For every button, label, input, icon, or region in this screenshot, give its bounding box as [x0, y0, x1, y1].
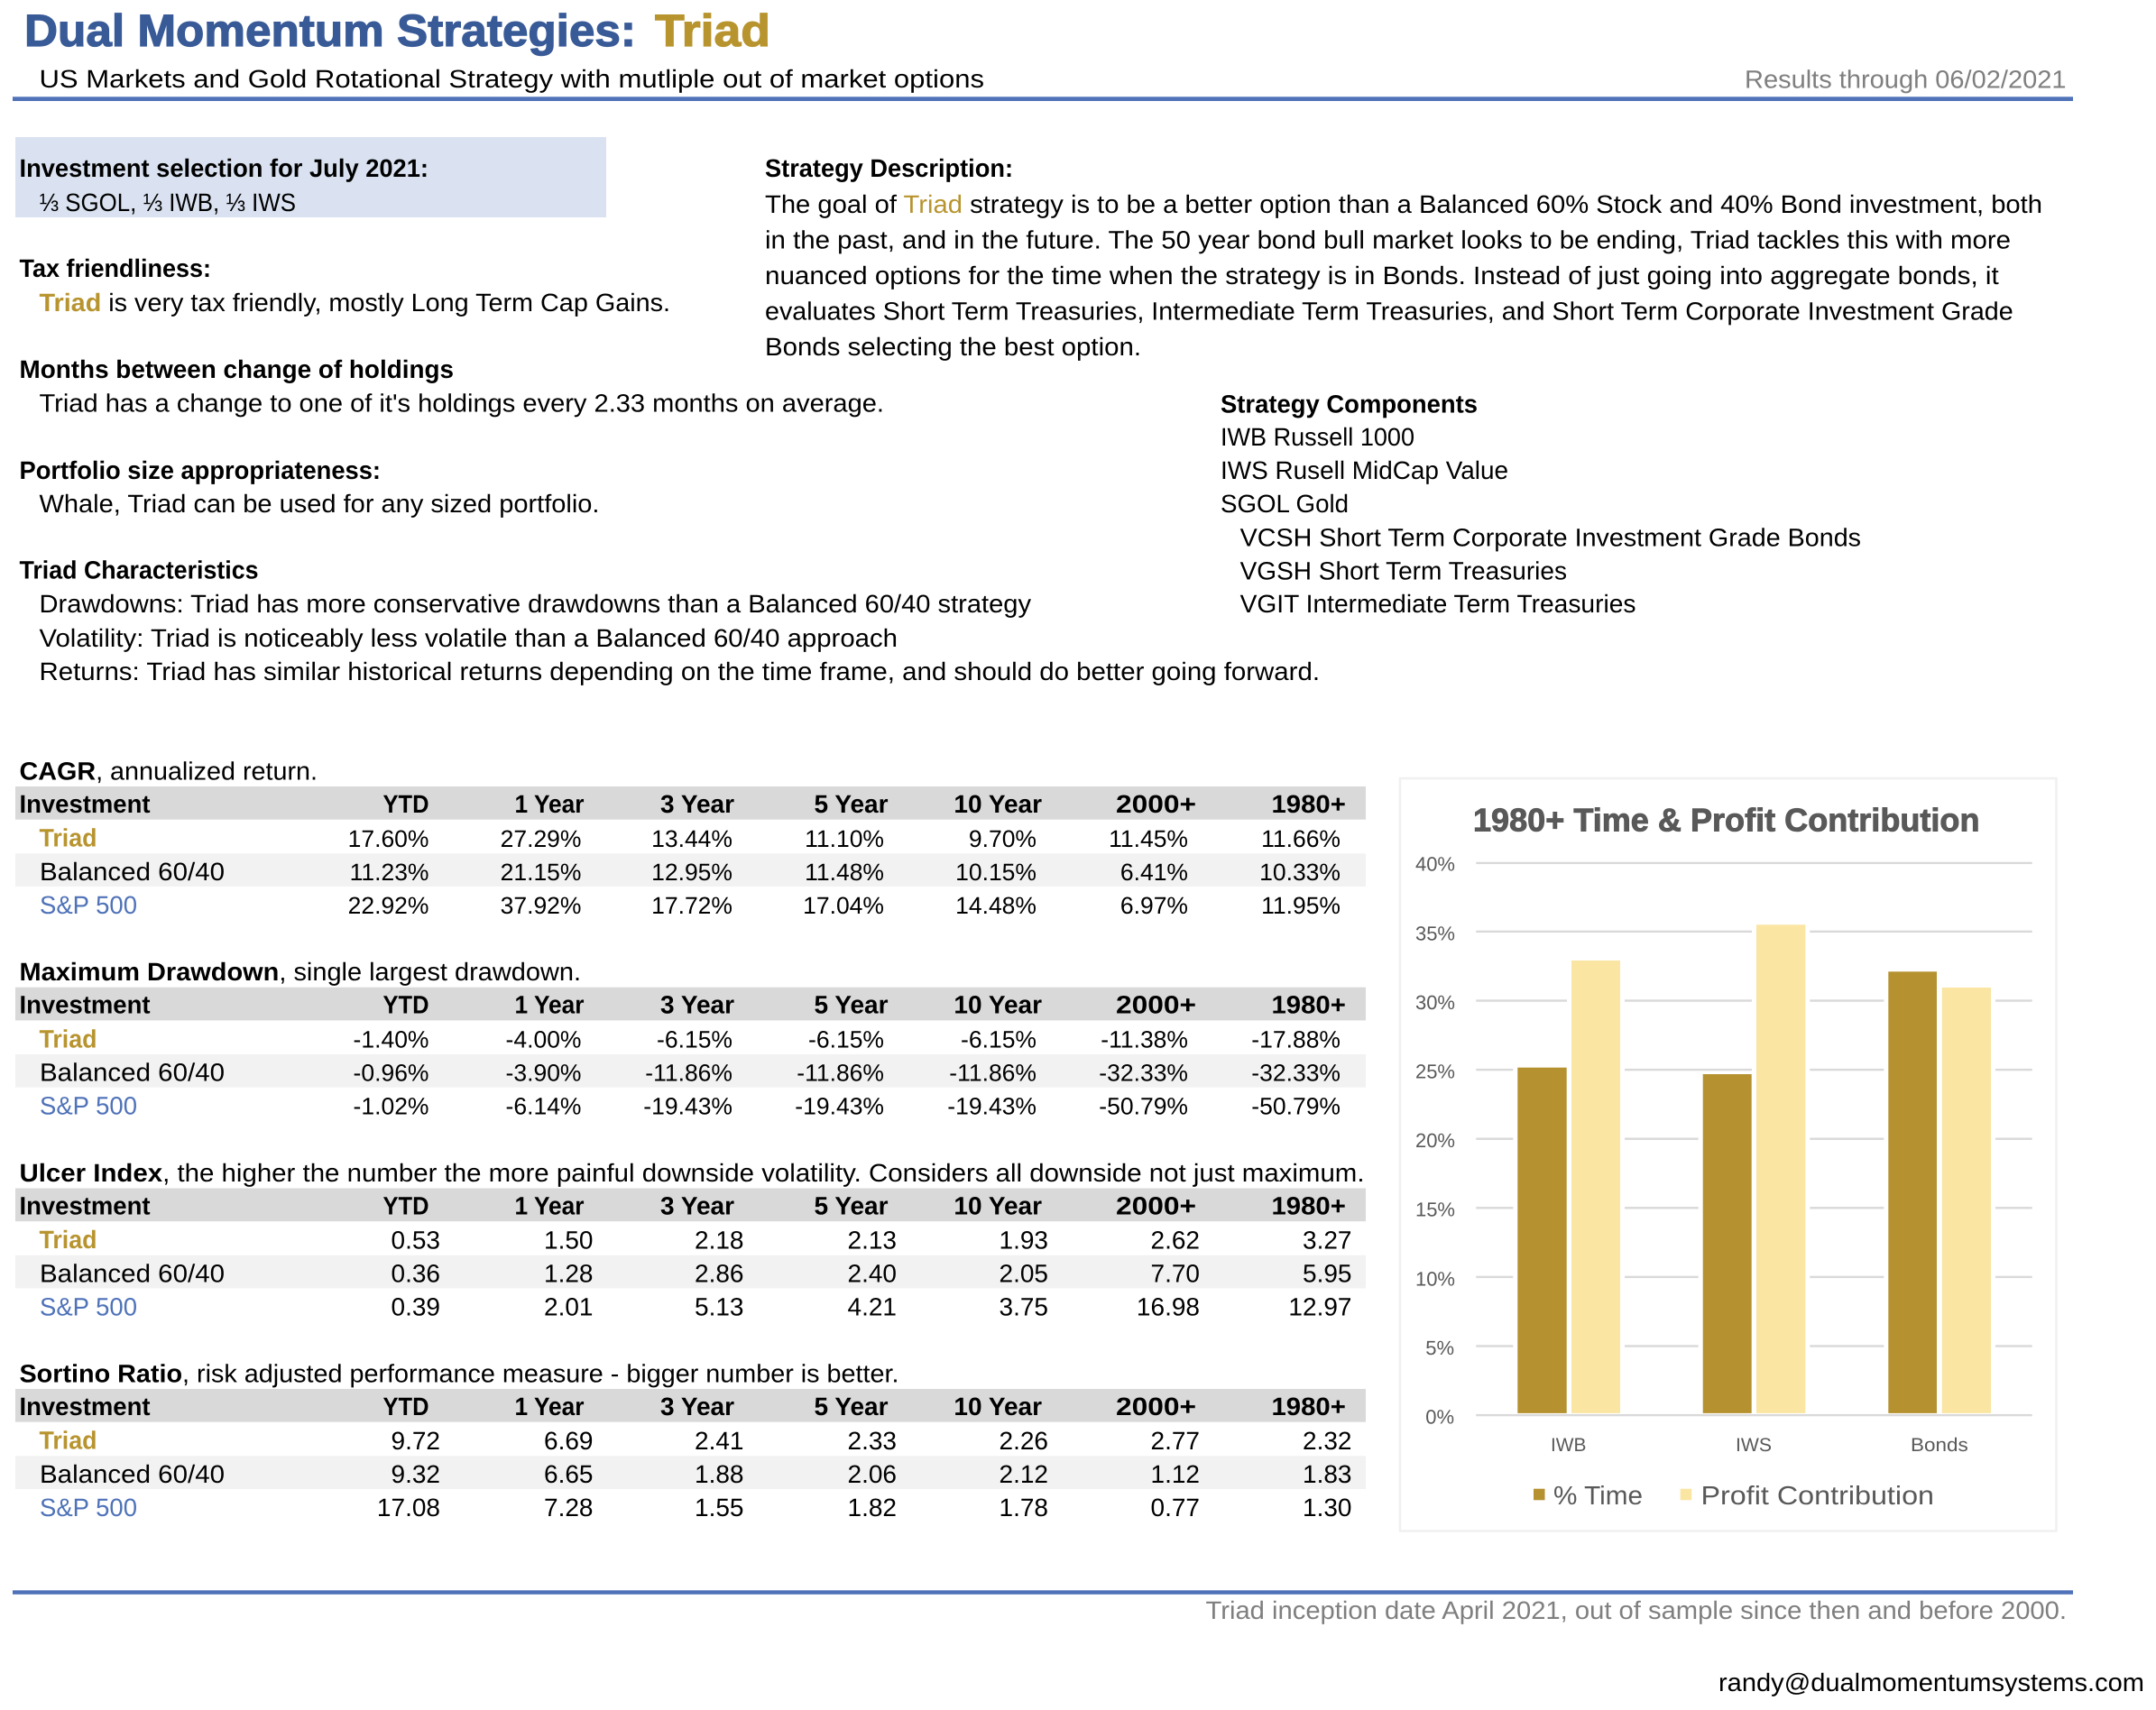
footnote: Triad inception date April 2021, out of sample since then and before 2000. [1205, 1596, 2067, 1624]
row: Balanced 60/40: Balanced 60/40 [40, 1460, 225, 1488]
bars: IWB [1513, 961, 1625, 1414]
header row: Investment [20, 790, 150, 818]
row: Balanced 60/40: -32.33% [1099, 1060, 1188, 1087]
table: CAGR [15, 758, 1366, 919]
row: Balanced 60/40: 11.48% [805, 859, 884, 886]
text block: strategy components: VCSH Short Term Corporate Investment Grade Bonds [1240, 523, 1861, 552]
row: Triad: 1.93 [1000, 1227, 1048, 1254]
header row: YTD [382, 991, 429, 1019]
table: Sortino Ratio [15, 1360, 1366, 1522]
header row: 1980+ [1272, 991, 1346, 1019]
x axis labels: IWS [1736, 1435, 1772, 1456]
header row: Investment [20, 991, 150, 1019]
row: Triad: 2.77 [1151, 1427, 1200, 1455]
row: Triad: 2.18 [695, 1227, 743, 1254]
row: S&P 500: 3.75 [1000, 1293, 1048, 1320]
table title: Maximum Drawdown , single largest drawdown. [20, 958, 581, 986]
header row [15, 1189, 1366, 1221]
bars: IWS [1699, 924, 1810, 1414]
title: Dual Momentum Strategies: [24, 5, 636, 56]
row: Triad: 13.44% [651, 825, 732, 852]
row: Balanced 60/40: -0.96% [354, 1060, 429, 1087]
row: Balanced 60/40: 2.86 [695, 1259, 743, 1288]
row: S&P 500: 11.95% [1261, 892, 1341, 919]
y axis labels: 35% [1415, 922, 1455, 944]
row: Triad [40, 1025, 1341, 1053]
row: Balanced 60/40: 2.12 [1000, 1460, 1048, 1488]
header row: 10 Year [954, 1393, 1042, 1420]
row: Balanced 60/40: 11.23% [350, 859, 429, 886]
row: S&P 500: 12.97 [1288, 1293, 1351, 1320]
header row: 3 Year [660, 790, 734, 818]
row: Triad: 0.53 [392, 1227, 440, 1254]
row: S&P 500: 6.97% [1120, 892, 1188, 919]
row: Triad: 9.72 [392, 1427, 440, 1455]
y axis labels [1415, 853, 1455, 1429]
row: Triad: 11.45% [1109, 825, 1188, 852]
row: S&P 500: S&P 500 [40, 1293, 137, 1320]
row: Triad: 2.26 [1000, 1427, 1048, 1455]
text block: tax friendliness [20, 254, 670, 317]
row: Balanced 60/40: 12.95% [651, 859, 732, 886]
header row: YTD [382, 1192, 429, 1219]
text block: strategy components: Strategy Components [1221, 390, 1478, 418]
row: S&P 500: 7.28 [544, 1494, 594, 1522]
y axis labels: 10% [1415, 1267, 1455, 1290]
row: Triad: Triad [40, 824, 97, 851]
row: Balanced 60/40: -11.86% [645, 1060, 732, 1087]
header row: 5 Year [814, 790, 889, 818]
row: Balanced 60/40 [15, 1255, 1366, 1288]
bar chart: 1980+ time and profit contribution [1400, 778, 2057, 1531]
results date: Results through 06/02/2021 [1745, 65, 2066, 94]
panel: investment selection: ⅓ SGOL, ⅓ IWB, ⅓ IWS [40, 188, 296, 216]
header row: 10 Year [954, 1192, 1042, 1219]
row: S&P 500: -50.79% [1099, 1093, 1188, 1120]
text block: triad characteristics: Volatility: Triad is noticeably less volatile than a Balanced 60/40 approach [40, 624, 898, 652]
row: S&P 500: -19.43% [643, 1093, 732, 1120]
y axis labels: 30% [1415, 991, 1455, 1014]
contact email: randy@dualmomentumsystems.com [1718, 1669, 2144, 1696]
row: Balanced 60/40: 6.41% [1120, 859, 1188, 886]
header row: 3 Year [660, 991, 734, 1019]
text block: triad characteristics: Returns: Triad has similar historical returns depending on the time frame, and should do better going forward. [40, 657, 1320, 685]
y axis labels: 25% [1415, 1061, 1455, 1082]
row: S&P 500: 16.98 [1137, 1293, 1200, 1320]
row: Balanced 60/40 [15, 1456, 1366, 1489]
text block: strategy description: in the past, and in the future. The 50 year bond bull market looks to be ending, Triad tackles this with more [765, 225, 2011, 254]
row: S&P 500: 17.04% [803, 892, 884, 919]
row: Triad: 2.62 [1151, 1227, 1200, 1254]
row: Triad: 2.33 [848, 1427, 897, 1455]
row: S&P 500: -1.02% [354, 1093, 429, 1120]
header row: 2000+ [1116, 1393, 1196, 1420]
row: Triad [40, 824, 1341, 852]
row: Balanced 60/40 [15, 1054, 1366, 1088]
text block: portfolio size: Whale, Triad can be used for any sized portfolio. [40, 490, 599, 518]
row: S&P 500: S&P 500 [40, 1092, 137, 1120]
row: Triad: 11.66% [1261, 825, 1341, 852]
row: Balanced 60/40: 2.05 [1000, 1259, 1048, 1288]
text block: strategy components: SGOL Gold [1221, 490, 1349, 518]
header row: 2000+ [1116, 790, 1196, 818]
row: S&P 500: 1.55 [695, 1494, 743, 1522]
table title: Ulcer Index , the higher the number the more painful downside volatility. Considers all downside not just maximum. [20, 1159, 1364, 1187]
chart title: 1980+ Time & Profit Contribution [1473, 802, 1979, 839]
row: Balanced 60/40: 1.88 [695, 1460, 743, 1488]
text block: months between change of holdings: Triad has a change to one of it's holdings every 2.33 months on average. [40, 390, 884, 417]
row: S&P 500: 5.13 [695, 1293, 743, 1320]
header row: 3 Year [660, 1192, 734, 1219]
row: Balanced 60/40: Balanced 60/40 [40, 1259, 225, 1288]
text block: tax friendliness: Triad is very tax friendly, mostly Long Term Cap Gains. [40, 289, 670, 317]
header row: 10 Year [954, 991, 1042, 1019]
row: Triad: 3.27 [1303, 1227, 1351, 1254]
row: S&P 500: 2.01 [544, 1293, 594, 1320]
text block: strategy description [765, 154, 2042, 361]
text block: strategy components [1221, 390, 1861, 618]
header row: 1 Year [514, 1393, 585, 1420]
y axis labels: 5% [1425, 1337, 1454, 1359]
row: Balanced 60/40: 0.36 [392, 1259, 440, 1288]
row: Triad: 2.41 [695, 1427, 743, 1455]
row: Balanced 60/40: Balanced 60/40 [40, 858, 225, 886]
row: Balanced 60/40: 2.06 [848, 1460, 897, 1488]
row: S&P 500: 17.08 [377, 1494, 440, 1522]
text block: strategy components: IWB Russell 1000 [1221, 423, 1414, 451]
row: Balanced 60/40: -3.90% [506, 1060, 581, 1087]
header row: 1 Year [514, 991, 585, 1019]
x axis labels: IWB [1551, 1435, 1586, 1456]
y axis labels: 40% [1415, 853, 1455, 876]
row: Triad: Triad [40, 1025, 97, 1053]
text block: strategy description: nuanced options for the time when the strategy is in Bonds. Instead of just going into aggregate bonds, it [765, 262, 1999, 290]
panel: investment selection [15, 137, 606, 217]
y axis labels: 20% [1415, 1129, 1455, 1152]
row: Triad: -11.38% [1101, 1026, 1188, 1053]
row: Triad: 2.32 [1303, 1427, 1351, 1455]
row: Balanced 60/40: 9.32 [392, 1460, 440, 1488]
row: Balanced 60/40: 6.65 [544, 1460, 594, 1488]
text block: strategy description: The goal of Triad strategy is to be a better option than a Balanced 60% Stock and 40% Bond investment, both [765, 190, 2042, 218]
row: S&P 500: 0.39 [392, 1293, 440, 1320]
header row: YTD [382, 1393, 429, 1420]
text block: months between change of holdings [20, 355, 884, 417]
text block: strategy components: VGSH Short Term Treasuries [1240, 557, 1567, 584]
row: S&P 500 [40, 1293, 1351, 1320]
row: S&P 500: -19.43% [795, 1093, 884, 1120]
row: S&P 500: 17.72% [651, 892, 732, 919]
row: Balanced 60/40: -32.33% [1251, 1060, 1341, 1087]
header row: 1980+ [1272, 790, 1346, 818]
y axis labels: 0% [1425, 1405, 1454, 1429]
panel: investment selection: Investment selection for July 2021: [20, 154, 428, 182]
row: Triad: 11.10% [805, 825, 884, 852]
header row: 10 Year [954, 790, 1042, 818]
bars: Bonds [1884, 971, 1995, 1414]
header row: 5 Year [814, 1192, 889, 1219]
header row [15, 1389, 1366, 1422]
table: Maximum Drawdown [15, 958, 1366, 1120]
text block: months between change of holdings: Months between change of holdings [20, 355, 454, 383]
row: S&P 500: 1.30 [1303, 1494, 1351, 1522]
row: Balanced 60/40 [15, 853, 1366, 887]
text block: strategy description: evaluates Short Term Treasuries, Intermediate Term Treasuries, and Short Term Corporate Investment Grade [765, 297, 2013, 325]
text block: portfolio size: Portfolio size appropriateness: [20, 456, 381, 484]
row: Balanced 60/40: 21.15% [501, 859, 581, 886]
text block: strategy description: Strategy Description: [765, 154, 1013, 182]
header row: 5 Year [814, 1393, 889, 1420]
text block: triad characteristics [20, 556, 1320, 685]
row: Triad: 9.70% [969, 825, 1037, 852]
text block: strategy components: IWS Rusell MidCap Value [1221, 456, 1508, 484]
row: S&P 500: -6.14% [506, 1093, 581, 1120]
x axis labels: Bonds [1911, 1435, 1968, 1456]
header row [15, 786, 1366, 820]
x axis labels [1551, 1435, 1968, 1456]
row: S&P 500: 37.92% [501, 892, 581, 919]
header row: 1980+ [1272, 1393, 1346, 1420]
row: Triad: 1.50 [544, 1227, 594, 1254]
row: Balanced 60/40: -11.86% [949, 1060, 1037, 1087]
row: S&P 500: 1.82 [848, 1494, 897, 1522]
row: Balanced 60/40: Balanced 60/40 [40, 1059, 225, 1087]
header row: 2000+ [1116, 1192, 1196, 1219]
row: S&P 500 [40, 1092, 1341, 1120]
table: Ulcer Index [15, 1159, 1366, 1320]
header row: 1 Year [514, 790, 585, 818]
text block: triad characteristics: Drawdowns: Triad has more conservative drawdowns than a Balanced 60/40 strategy [40, 590, 1031, 618]
text block: strategy components: VGIT Intermediate Term Treasuries [1240, 590, 1636, 618]
text block: portfolio size [20, 456, 599, 518]
row: Triad [40, 1226, 1351, 1254]
row: Balanced 60/40: 10.33% [1259, 859, 1341, 886]
header row: 1980+ [1272, 1192, 1346, 1219]
row: Triad: -6.15% [808, 1026, 884, 1053]
row: Balanced 60/40: 1.28 [544, 1259, 594, 1288]
row: Balanced 60/40: -11.86% [797, 1060, 884, 1087]
row: Triad: 2.13 [848, 1227, 897, 1254]
row: Triad: Triad [40, 1427, 97, 1454]
row: Triad: -6.15% [657, 1026, 732, 1053]
header row: 1 Year [514, 1192, 585, 1219]
row: S&P 500: 4.21 [848, 1293, 897, 1320]
legend: % Time [1553, 1482, 1643, 1511]
table title: Sortino Ratio, risk adjusted performance measure - bigger number is better. [20, 1360, 898, 1387]
header row: 5 Year [814, 991, 889, 1019]
row: Triad: 17.60% [348, 825, 429, 852]
header row: Investment [20, 1192, 150, 1219]
row: S&P 500 [40, 1494, 1351, 1522]
y axis labels: 15% [1415, 1199, 1455, 1221]
header row: 3 Year [660, 1393, 734, 1420]
title: Triad [655, 5, 770, 56]
row: Triad: Triad [40, 1226, 97, 1254]
row: Balanced 60/40: 1.83 [1303, 1460, 1351, 1488]
legend [1534, 1482, 1934, 1511]
row: Balanced 60/40: 5.95 [1303, 1259, 1351, 1288]
row: S&P 500: 0.77 [1151, 1494, 1200, 1522]
row: Triad: 27.29% [501, 825, 581, 852]
legend: Profit Contribution [1701, 1482, 1934, 1511]
row: S&P 500: 22.92% [348, 892, 429, 919]
row: S&P 500: -50.79% [1251, 1093, 1341, 1120]
row: Triad: 6.69 [544, 1427, 594, 1455]
row: Triad: -6.15% [961, 1026, 1037, 1053]
text block: tax friendliness: Tax friendliness: [20, 254, 211, 282]
text block: strategy description: Bonds selecting the best option. [765, 333, 1141, 361]
header row: Investment [20, 1393, 150, 1420]
row: S&P 500: 1.78 [1000, 1494, 1048, 1522]
row: Triad: -1.40% [354, 1026, 429, 1053]
row: Balanced 60/40: 7.70 [1151, 1259, 1200, 1288]
header row [15, 988, 1366, 1020]
row: S&P 500: -19.43% [947, 1093, 1037, 1120]
row: Triad: -4.00% [506, 1026, 581, 1053]
row: Balanced 60/40: 1.12 [1151, 1460, 1200, 1488]
row: Balanced 60/40: 2.40 [848, 1259, 897, 1288]
text block: triad characteristics: Triad Characteristics [20, 556, 258, 584]
row: Triad: -17.88% [1251, 1026, 1341, 1053]
row: S&P 500: 14.48% [955, 892, 1037, 919]
row: S&P 500: S&P 500 [40, 891, 137, 919]
subtitle: US Markets and Gold Rotational Strategy with mutliple out of market options [40, 65, 984, 93]
header row: 2000+ [1116, 991, 1196, 1019]
row: Balanced 60/40: 10.15% [955, 859, 1037, 886]
row: S&P 500 [40, 891, 1341, 919]
row: Triad [40, 1427, 1351, 1455]
header row: YTD [382, 790, 429, 818]
table title: CAGR, annualized return. [20, 758, 318, 785]
row: S&P 500: S&P 500 [40, 1494, 137, 1522]
